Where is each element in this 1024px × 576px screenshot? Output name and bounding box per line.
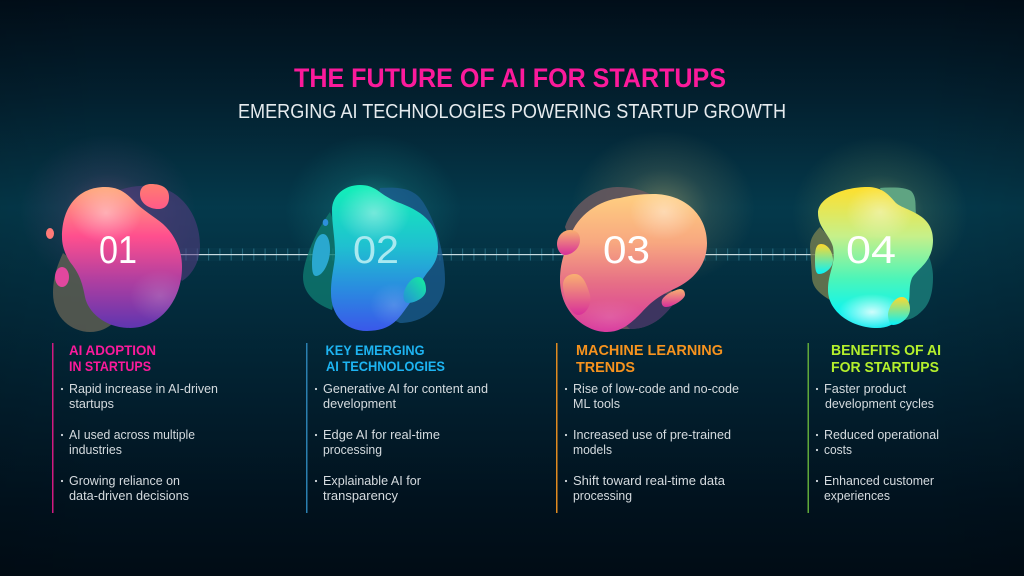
bullet list: Reduced operational — [824, 427, 939, 442]
bullet list — [315, 381, 488, 503]
back shapes — [565, 187, 678, 329]
bullet list: Rapid increase in AI-driven — [69, 381, 218, 396]
bullet list — [61, 381, 218, 503]
bullet list: development cycles — [825, 396, 934, 411]
bullet list: Shift toward real-time data — [573, 473, 726, 488]
heading — [831, 343, 941, 376]
heading: AI TECHNOLOGIES — [326, 358, 445, 374]
bullet list: Faster product — [824, 381, 906, 396]
bullet list: Edge AI for real-time — [323, 427, 440, 442]
bullet list: models — [573, 442, 612, 457]
subtitle: EMERGING AI TECHNOLOGIES POWERING STARTUP GROWTH — [238, 101, 786, 123]
bullet list: processing — [573, 488, 632, 503]
bullet list: Generative AI for content and — [323, 381, 488, 396]
main shape — [818, 187, 933, 328]
blob 04 — [808, 150, 952, 328]
heading: AI ADOPTION — [69, 342, 156, 358]
glow — [20, 134, 196, 290]
number: 02 — [353, 229, 399, 272]
heading: FOR STARTUPS — [831, 360, 939, 376]
bullet list: processing — [323, 442, 382, 457]
small shapes — [815, 244, 833, 274]
highlights — [588, 194, 692, 328]
main shape — [62, 187, 182, 328]
glow — [571, 130, 755, 286]
small shapes — [140, 184, 169, 209]
title: THE FUTURE OF AI FOR STARTUPS — [294, 63, 726, 93]
bullet list: Increased use of pre-trained — [573, 427, 731, 442]
back shapes — [350, 188, 445, 323]
bullet list: Explainable AI for — [323, 473, 422, 488]
heading — [69, 342, 156, 374]
blob 02 — [303, 150, 445, 331]
bullet list: costs — [824, 442, 852, 457]
bullet list: data-driven decisions — [69, 488, 189, 503]
number: 03 — [603, 229, 650, 272]
small shapes — [557, 230, 580, 255]
bullet list: experiences — [824, 488, 890, 503]
highlights — [342, 186, 410, 321]
main shape — [560, 194, 707, 332]
number: 01 — [99, 229, 137, 272]
bullet list: transparency — [323, 488, 399, 503]
highlights — [840, 188, 910, 328]
heading — [576, 342, 723, 376]
bullet list: Rise of low-code and no-code — [573, 381, 739, 396]
panel: key emerging AI technologies — [306, 342, 488, 513]
number: 04 — [846, 229, 896, 272]
bullet list — [565, 381, 739, 503]
heading: IN STARTUPS — [69, 358, 151, 374]
panel: machine learning trends — [556, 342, 739, 513]
heading: BENEFITS OF AI — [831, 343, 941, 359]
timeline connector — [180, 248, 840, 261]
back shapes — [860, 187, 933, 320]
blob 03 — [557, 141, 742, 332]
heading: MACHINE LEARNING — [576, 342, 723, 359]
bullet list: ML tools — [573, 396, 620, 411]
bullet list — [816, 381, 939, 503]
bullet list: development — [323, 396, 396, 411]
blob 01 — [36, 149, 200, 332]
glow — [285, 134, 461, 290]
panel: benefits of AI — [808, 343, 941, 513]
heading: KEY EMERGING — [326, 342, 425, 358]
heading: TRENDS — [576, 359, 635, 376]
bullet list: AI used across multiple — [69, 427, 195, 442]
small shapes — [312, 234, 330, 276]
panel: AI adoption — [52, 342, 218, 513]
bullet list: industries — [69, 442, 122, 457]
bullet list: startups — [69, 396, 114, 411]
heading — [326, 342, 445, 374]
glow — [792, 136, 968, 292]
back shapes — [115, 186, 200, 281]
highlights — [76, 188, 179, 315]
main shape — [331, 185, 438, 331]
bullet list: Enhanced customer — [824, 473, 935, 488]
bullet list: Growing reliance on — [69, 473, 180, 488]
